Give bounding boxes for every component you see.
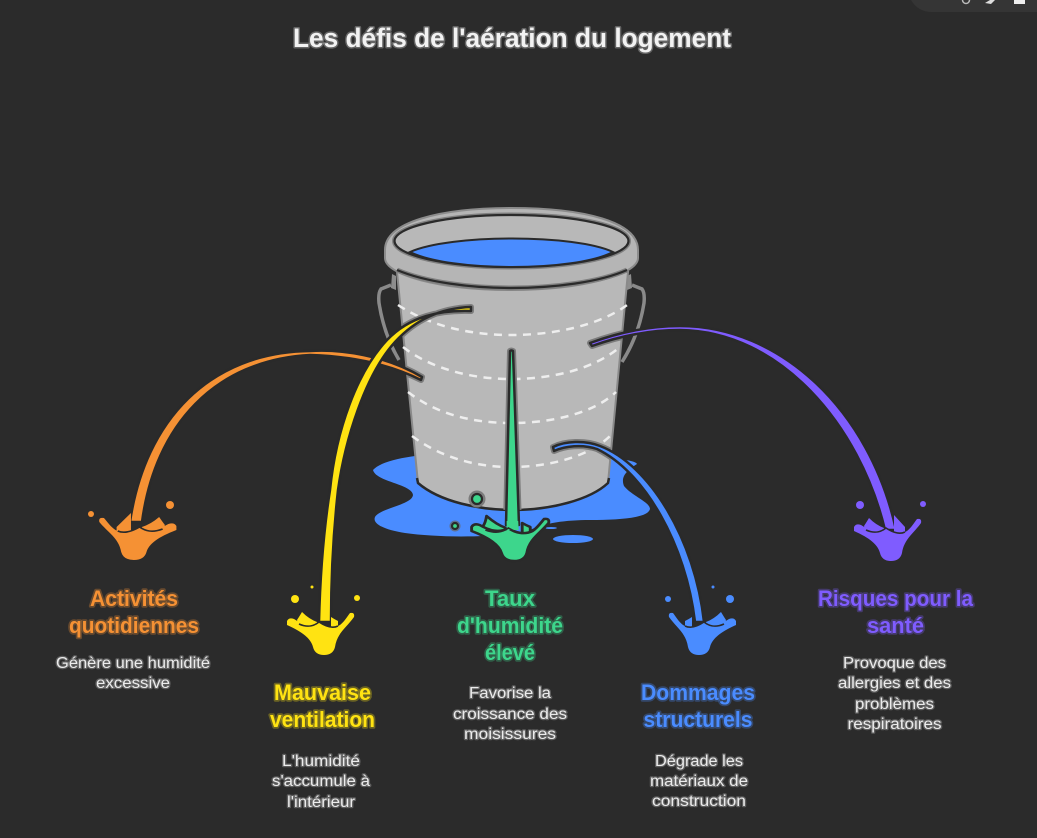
toolbar corner	[911, 0, 1037, 12]
splash: purple	[854, 501, 926, 561]
description: s'accumule à	[272, 773, 370, 790]
description: L'humidité	[282, 753, 360, 770]
stream: green	[506, 350, 519, 525]
splash: yellow	[287, 586, 360, 655]
description: Favorise la	[469, 685, 551, 702]
heading: structurels	[644, 707, 752, 732]
heading: d'humidité	[457, 613, 563, 638]
heading: ventilation	[270, 707, 375, 732]
stream: purple	[590, 326, 896, 530]
description	[453, 685, 567, 743]
description: Provoque des	[843, 655, 946, 672]
description: allergies et des	[838, 675, 951, 692]
heading	[818, 586, 974, 638]
heading	[641, 680, 755, 732]
puddle	[373, 456, 650, 543]
bucket handles	[379, 274, 644, 362]
bucket body	[397, 272, 628, 510]
description: construction	[652, 793, 746, 810]
description: l'intérieur	[287, 794, 355, 811]
bucket dashes	[398, 305, 627, 467]
description	[56, 655, 210, 692]
heading: santé	[867, 613, 924, 638]
description	[650, 753, 748, 810]
text block: risques pour la santé	[818, 586, 974, 733]
stream halos on bucket	[402, 304, 622, 510]
description	[838, 655, 951, 733]
icon: bucket	[379, 208, 644, 510]
stream: orange	[130, 351, 422, 522]
text block: taux d'humidité élevé	[453, 586, 567, 743]
bucket holes	[450, 490, 486, 532]
heading	[69, 586, 199, 638]
text block: mauvaise ventilation	[270, 680, 375, 811]
description: excessive	[96, 675, 170, 692]
title: Les défis de l'aération du logement	[293, 23, 731, 53]
description: moisissures	[464, 726, 556, 743]
stream: blue	[553, 442, 704, 622]
description: respiratoires	[848, 716, 942, 733]
description: Dégrade les	[655, 753, 743, 770]
heading: Dommages	[641, 680, 755, 705]
heading: élevé	[485, 640, 535, 665]
stream: yellow	[319, 307, 471, 622]
heading: Risques pour la	[818, 586, 974, 611]
splash: blue	[665, 586, 736, 655]
splash: orange	[88, 501, 176, 560]
heading: Taux	[485, 586, 536, 611]
text block: activités quotidiennes	[56, 586, 210, 692]
description: problèmes	[855, 696, 934, 713]
text block: dommages structurels	[641, 680, 755, 810]
bucket water	[410, 238, 613, 267]
heading: quotidiennes	[69, 613, 199, 638]
heading: Activités	[90, 586, 178, 611]
description	[272, 753, 370, 811]
heading	[270, 680, 375, 732]
splash: green	[472, 516, 549, 561]
heading: Mauvaise	[274, 680, 371, 705]
bucket rim	[385, 208, 638, 290]
description: Génère une humidité	[56, 655, 210, 672]
heading	[457, 586, 563, 665]
description: croissance des	[453, 706, 567, 723]
description: matériaux de	[650, 773, 748, 790]
